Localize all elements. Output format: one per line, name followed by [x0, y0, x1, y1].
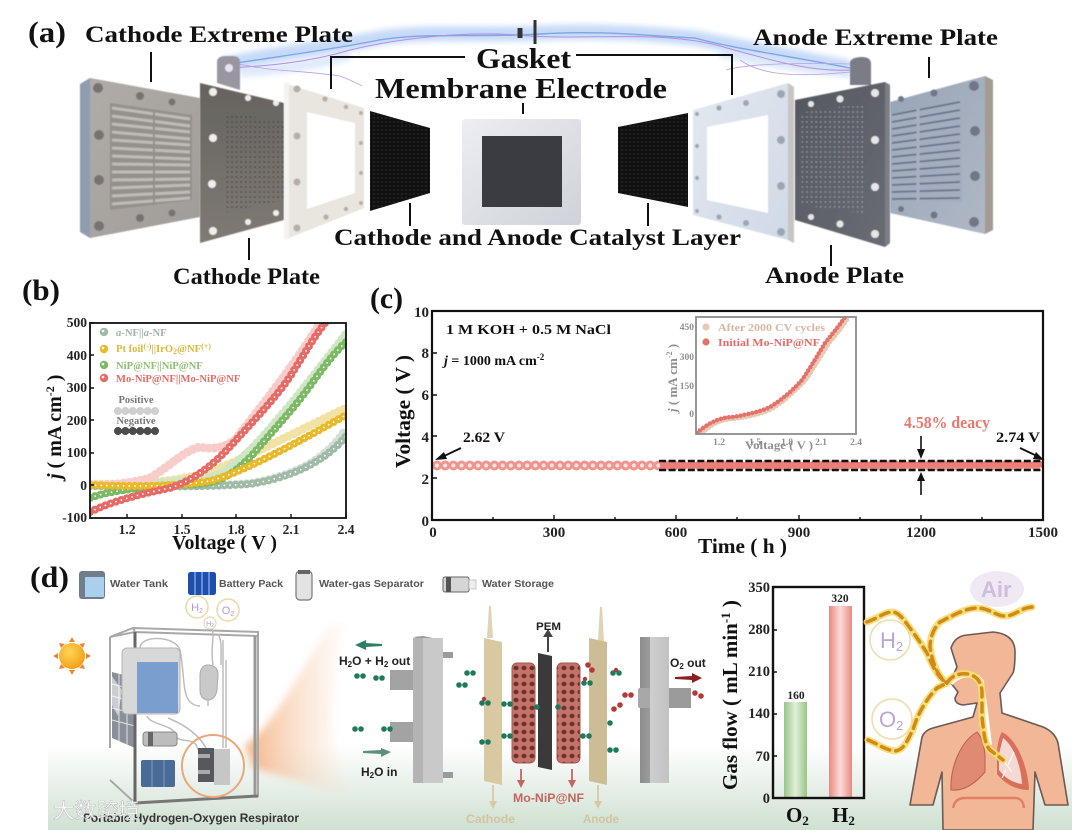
watermark logo and text: 大数跨境: [53, 800, 140, 823]
anode gasket: [693, 83, 794, 243]
label: PEM: PEM: [536, 621, 561, 633]
gas bubbles H2 O2: H: [191, 602, 199, 614]
curve: Pt: [90, 415, 346, 486]
x tick labels: 1.2: [119, 522, 136, 537]
bar: H2 320: [829, 606, 852, 798]
inset chart: [665, 317, 862, 452]
value labels: 160: [787, 690, 805, 702]
y tick labels: 0: [80, 478, 87, 493]
sunbeam: [88, 660, 122, 716]
water-gas separator: [200, 665, 218, 700]
anode plate: [795, 57, 890, 247]
x tick labels: 1500: [1028, 525, 1058, 541]
label: H2O + H2 out: H: [339, 654, 348, 668]
electrode legend: positive and negative: Positive: [118, 395, 154, 406]
label: Gasket: Gasket: [476, 44, 572, 75]
gas labels: 2: [896, 639, 903, 654]
cathode current collector: [484, 606, 502, 785]
diaphragm: [953, 798, 1024, 808]
watermark logo and text: [11, 799, 140, 823]
legend: a-NF||a-NF: [116, 328, 167, 339]
legend: Mo-NiP@NF||Mo-NiP@NF: [116, 374, 240, 385]
bar chart: gas flow: [718, 580, 864, 828]
cathode plate: [200, 56, 284, 243]
box frame: [110, 628, 258, 803]
circle: H2: [870, 620, 910, 660]
condition text: 1 M KOH + 0.5 M NaCl: [446, 323, 611, 338]
value labels: 320: [831, 593, 849, 605]
label: H2O + H2 out: 2: [348, 660, 353, 669]
water tank: [122, 648, 180, 714]
label: Anode: Anode: [583, 812, 619, 826]
Mo-NiP foams: [512, 663, 580, 763]
tubes: [140, 628, 226, 750]
annotation: 2.74 V: 2.74 V: [996, 430, 1040, 446]
inset tick labels: 150: [680, 382, 694, 392]
inset axis titles: Voltage ( V ): [745, 438, 813, 452]
label: H2O in: H: [361, 765, 370, 779]
tick labels: 210: [748, 664, 770, 680]
anode extreme plate: [890, 76, 993, 234]
y axis title: -1: [718, 612, 733, 623]
label: Cathode and Anode Catalyst Layer: Cathode and Anode Catalyst Layer: [334, 225, 741, 250]
lightning arc: [224, 32, 850, 86]
leader lines: [151, 20, 929, 266]
curve: a-NF: [90, 436, 346, 487]
annotation: 4.58% decay: [904, 413, 990, 495]
x tick labels: 2.1: [283, 522, 300, 537]
y tick labels: 100: [67, 445, 87, 460]
gas bubbles H2 O2: [186, 596, 239, 629]
label: Anode Extreme Plate: Anode Extreme Plate: [753, 25, 998, 50]
panel: (a) exploded electrolyzer stack: [28, 16, 998, 289]
bubble: Air: [970, 571, 1024, 607]
cathode catalyst layer: [370, 111, 430, 211]
label: H2O in: O in: [374, 765, 397, 779]
legend: NiP@NF||NiP@NF: [116, 361, 203, 372]
cathode extreme plate: [80, 78, 200, 238]
tick labels: 70: [756, 749, 770, 765]
category labels: 2: [848, 813, 855, 828]
x axis title: Voltage ( V ): [172, 532, 277, 554]
inset chart: ): [665, 344, 680, 352]
x tick labels: 1200: [906, 525, 936, 541]
inset chart: j ( mA cm: [665, 358, 680, 412]
category labels: 2: [802, 813, 809, 828]
caption: Portable Hydrogen-Oxygen Respirator: Portable Hydrogen-Oxygen Respirator: [83, 811, 299, 825]
label: O2 out: out: [684, 656, 706, 670]
label: Membrane Electrode: Membrane Electrode: [375, 74, 667, 105]
legend: Water Tank: Water Tank: [110, 578, 168, 590]
panel: (c) long-term stability: [370, 282, 1058, 558]
x tick labels: [119, 522, 355, 537]
inset tick labels: 2.1: [815, 438, 827, 448]
flow arrows: [355, 629, 702, 809]
condition text: [442, 323, 611, 369]
y axis title: j ( mA cm: [44, 396, 66, 479]
inset tick labels: 1.8: [781, 438, 793, 448]
electrolyzer in box: [198, 748, 230, 785]
x tick labels: 300: [543, 525, 565, 541]
icon: battery pack: [188, 572, 216, 595]
icon: water storage: [443, 577, 476, 592]
gas labels: [879, 577, 1012, 733]
gas labels: 2: [896, 718, 903, 733]
x tick labels: 0: [429, 525, 437, 541]
panel: (d) portable respirator: [11, 561, 1072, 830]
inset tick labels: 300: [680, 353, 694, 363]
annotation: 4.58% decay: 4.58% deacy: [904, 413, 990, 432]
ground gradient: [48, 745, 1072, 830]
label: H2O + H2 out: O + H: [352, 654, 384, 668]
value labels: [787, 593, 849, 702]
label: H2O in: 2: [370, 771, 375, 780]
gas bubbles H2 O2: 2: [230, 611, 234, 618]
electrode legend: positive and negative: [116, 395, 157, 431]
inset legend: After 2000 CV cycles: [718, 322, 826, 334]
inset tick labels: 1.2: [713, 438, 725, 448]
gas bubbles H2 O2: O: [222, 605, 230, 617]
tick labels: 0: [763, 791, 770, 807]
gas labels: O: [879, 707, 896, 732]
category labels: [786, 803, 855, 828]
water storage: [143, 732, 177, 746]
solar panel: [112, 672, 135, 748]
bar: O2 160: [784, 702, 807, 798]
y tick labels: 0: [422, 514, 429, 530]
label: Cathode: Cathode: [466, 812, 515, 826]
legend: Water-gas Separator: Water-gas Separator: [319, 578, 424, 590]
legend: @NF: [177, 344, 201, 355]
y tick labels: 500: [67, 315, 87, 330]
pale positive curves: [90, 323, 346, 512]
legend: 2: [173, 347, 177, 356]
gas flow paths: [867, 607, 1032, 760]
line chart: voltage vs time: [391, 305, 1058, 558]
legend: Pt foil: [116, 344, 143, 355]
y axis title: Gas flow ( mL min: [718, 623, 742, 790]
icon: water-gas separator: [296, 570, 312, 600]
y tick labels: 6: [422, 388, 430, 404]
label: H2O + H2 out: out: [388, 654, 410, 668]
y tick labels: -100: [62, 510, 87, 525]
y axis title: Voltage ( V ): [391, 355, 415, 468]
right lung: [997, 732, 1029, 790]
axes frame: [90, 323, 346, 518]
inset tick labels: 0: [689, 410, 694, 420]
electrode legend: positive and negative: Negative: [116, 416, 156, 427]
legend: [100, 328, 240, 385]
PEM membrane: [538, 653, 552, 770]
y axis title: -2: [43, 386, 57, 396]
gas labels: H: [880, 628, 896, 653]
illustration: respirator box: [88, 628, 258, 803]
x tick labels: 1.8: [228, 522, 245, 537]
condition text: -2: [537, 352, 545, 362]
y tick labels: 8: [422, 346, 429, 362]
inset legend: [702, 322, 826, 349]
anode catalyst layer: [618, 113, 688, 207]
label: Mo-NiP@NF: Mo-NiP@NF: [513, 791, 584, 805]
icon: sun: [53, 637, 91, 675]
inset tick labels: 450: [680, 323, 694, 333]
y tick labels: 4: [422, 430, 430, 446]
cathode gasket: [284, 82, 364, 240]
gas bubbles H2 O2: H: [206, 621, 211, 628]
orange fan: [245, 622, 362, 798]
y tick labels: 400: [67, 348, 87, 363]
diagram: electrolyzer cell: [339, 606, 706, 826]
heading: (c): (c): [370, 282, 403, 315]
y tick labels: 300: [67, 380, 87, 395]
category labels: H: [832, 803, 848, 827]
inset tick labels: 2.4: [850, 438, 862, 448]
category labels: O: [786, 803, 802, 827]
annotation: 2.62 V: [435, 430, 505, 460]
gas bubbles H2 O2: 2: [211, 623, 214, 629]
heading: (b): (b): [22, 274, 60, 307]
left lung: [951, 732, 985, 790]
x tick labels: 1.5: [174, 522, 191, 537]
label: Cathode Extreme Plate: Cathode Extreme Plate: [85, 22, 353, 47]
x tick labels: [429, 525, 1058, 541]
annotation: 2.62 V: 2.62 V: [463, 430, 505, 446]
legend: (+): [201, 342, 211, 351]
inset tick labels: 1.5: [749, 438, 761, 448]
inset tick labels: [680, 323, 862, 448]
label: O2 out: 2: [679, 662, 684, 671]
y axis title: ): [718, 600, 742, 612]
x axis title: Time ( h ): [698, 534, 787, 558]
inset chart: -2: [665, 352, 674, 358]
tick labels: 350: [748, 580, 770, 596]
legend: Battery Pack: Battery Pack: [219, 578, 283, 590]
x tick labels: 900: [788, 525, 810, 541]
label: H2O + H2 out: 2: [384, 660, 389, 669]
x tick labels: 600: [665, 525, 687, 541]
y tick labels: [62, 315, 87, 525]
circle: O2: [872, 699, 912, 739]
tick labels: [748, 580, 770, 807]
y tick labels: [414, 305, 430, 530]
illustration: human respiratory system: [867, 571, 1068, 830]
curve: Mo-NiP: [90, 323, 325, 512]
y tick labels: 2: [422, 472, 429, 488]
label: Cathode Plate: Cathode Plate: [173, 264, 320, 289]
y axis title: ): [44, 375, 66, 386]
tick labels: 280: [748, 622, 770, 638]
icon: water tank: [79, 571, 105, 599]
membrane electrode: [462, 119, 581, 225]
molecules green: [352, 670, 622, 753]
tick labels: 140: [748, 706, 770, 722]
heading: (a): (a): [28, 16, 66, 49]
condition text: j = 1000 mA cm: [444, 354, 537, 369]
legend: (-): [143, 342, 152, 351]
panel: (b) polarization curves: [22, 274, 355, 554]
label: Anode Plate: Anode Plate: [765, 263, 904, 288]
x tick labels: 2.4: [338, 522, 355, 537]
label: O2 out: O: [670, 656, 679, 670]
anode current collector: [589, 607, 607, 785]
molecules red: [482, 662, 704, 712]
gas labels: Air: [981, 577, 1012, 602]
heading: (d): (d): [30, 561, 69, 594]
left end plate: [390, 636, 453, 783]
airway: [950, 675, 989, 745]
y tick labels: 10: [414, 305, 429, 321]
inset legend: Initial Mo-NiP@NF: [718, 337, 820, 349]
annotation: 2.74 V: [996, 430, 1044, 460]
battery: [141, 760, 175, 787]
body: [910, 632, 1068, 830]
orange highlight circle: [182, 735, 244, 797]
gas bubbles H2 O2: 2: [199, 608, 203, 615]
right end plate: [638, 637, 691, 783]
legend: ||IrO: [151, 344, 173, 355]
legend: Water Storage: Water Storage: [482, 578, 554, 590]
line chart: j vs voltage: [43, 315, 355, 554]
curve: NiP: [90, 342, 346, 498]
y tick labels: 200: [67, 413, 87, 428]
